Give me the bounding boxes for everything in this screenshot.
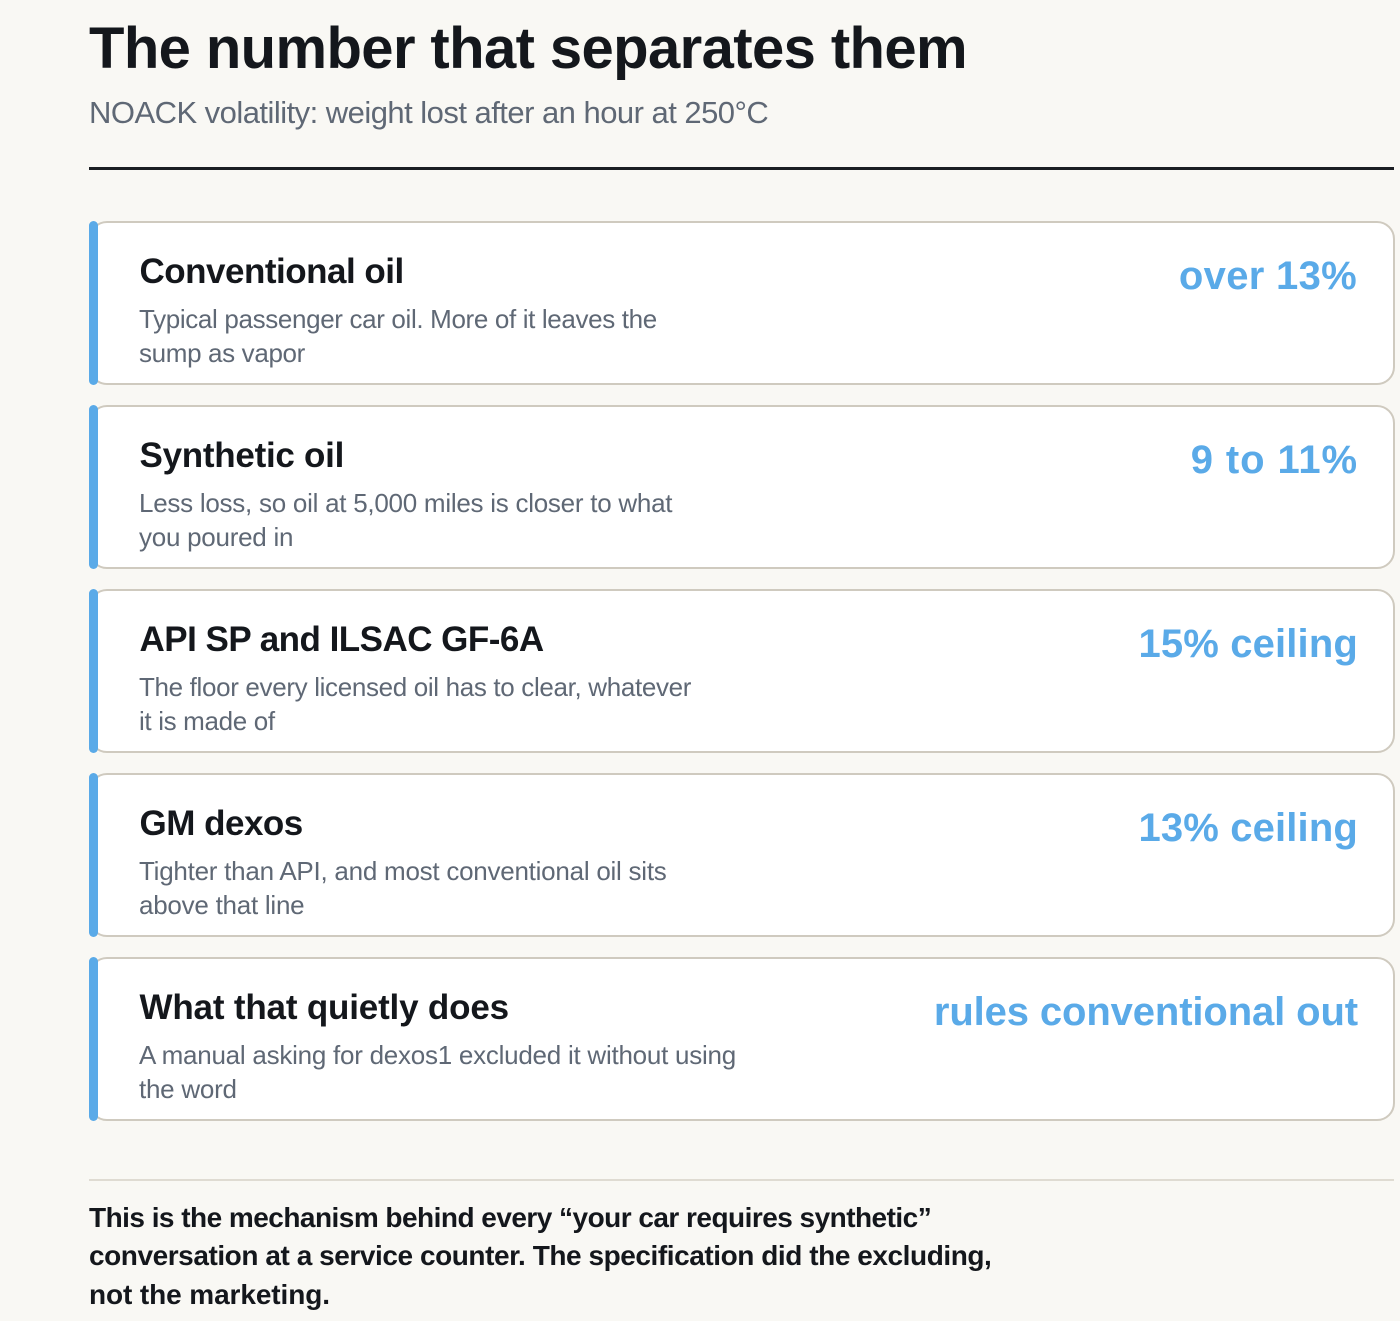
description: what that quietly does	[139, 1040, 736, 1104]
panel: GM dexos	[89, 773, 1395, 937]
closing note	[89, 1202, 991, 1310]
closing note: conversation at a service counter. The specification did the excluding,	[89, 1240, 991, 1271]
description: API SP and ILSAC GF-6A: The floor every licensed oil has to clear, whatever	[139, 672, 691, 702]
panel: synthetic oil	[89, 405, 1395, 569]
panel: conventional oil	[89, 221, 1395, 385]
description: synthetic oil: Less loss, so oil at 5,000 miles is closer to what	[139, 488, 672, 518]
heading: synthetic oil: Synthetic oil	[140, 436, 344, 475]
panel: what that quietly does	[89, 957, 1395, 1121]
description: conventional oil: sump as vapor	[139, 338, 305, 368]
description: API SP and ILSAC GF-6A: it is made of	[139, 706, 275, 736]
value: 15% ceiling: 15% ceiling	[1138, 622, 1358, 666]
description: conventional oil	[139, 304, 657, 368]
description: what that quietly does: the word	[139, 1074, 237, 1104]
title: The number that separates them	[89, 16, 967, 81]
value: 9 to 11%: 9 to 11%	[1191, 438, 1358, 482]
closing note: This is the mechanism behind every “your car requires synthetic”	[89, 1202, 931, 1233]
panel: API SP and ILSAC GF-6A	[89, 589, 1395, 753]
description: GM dexos: above that line	[139, 890, 304, 920]
description: synthetic oil	[139, 488, 672, 552]
heading: what that quietly does: What that quietly does	[140, 988, 509, 1027]
value: 13% ceiling: 13% ceiling	[1138, 806, 1358, 850]
description: synthetic oil: you poured in	[139, 522, 293, 552]
value: over 13%: over 13%	[1179, 254, 1357, 298]
subtitle: NOACK volatility: weight lost after an hour at 250°C	[89, 95, 768, 130]
description: GM dexos	[139, 856, 667, 920]
description: GM dexos: Tighter than API, and most conventional oil sits	[139, 856, 667, 886]
value: rules conventional out: rules conventional out	[934, 990, 1358, 1034]
heading: API SP and ILSAC GF-6A: API SP and ILSAC GF-6A	[140, 620, 544, 659]
heading: conventional oil: Conventional oil	[140, 252, 404, 291]
heading: GM dexos: GM dexos	[140, 804, 303, 843]
description: API SP and ILSAC GF-6A	[139, 672, 691, 736]
closing note: not the marketing.	[89, 1279, 330, 1310]
description: conventional oil: Typical passenger car oil. More of it leaves the	[139, 304, 657, 334]
description: what that quietly does: A manual asking for dexos1 excluded it without using	[139, 1040, 736, 1070]
